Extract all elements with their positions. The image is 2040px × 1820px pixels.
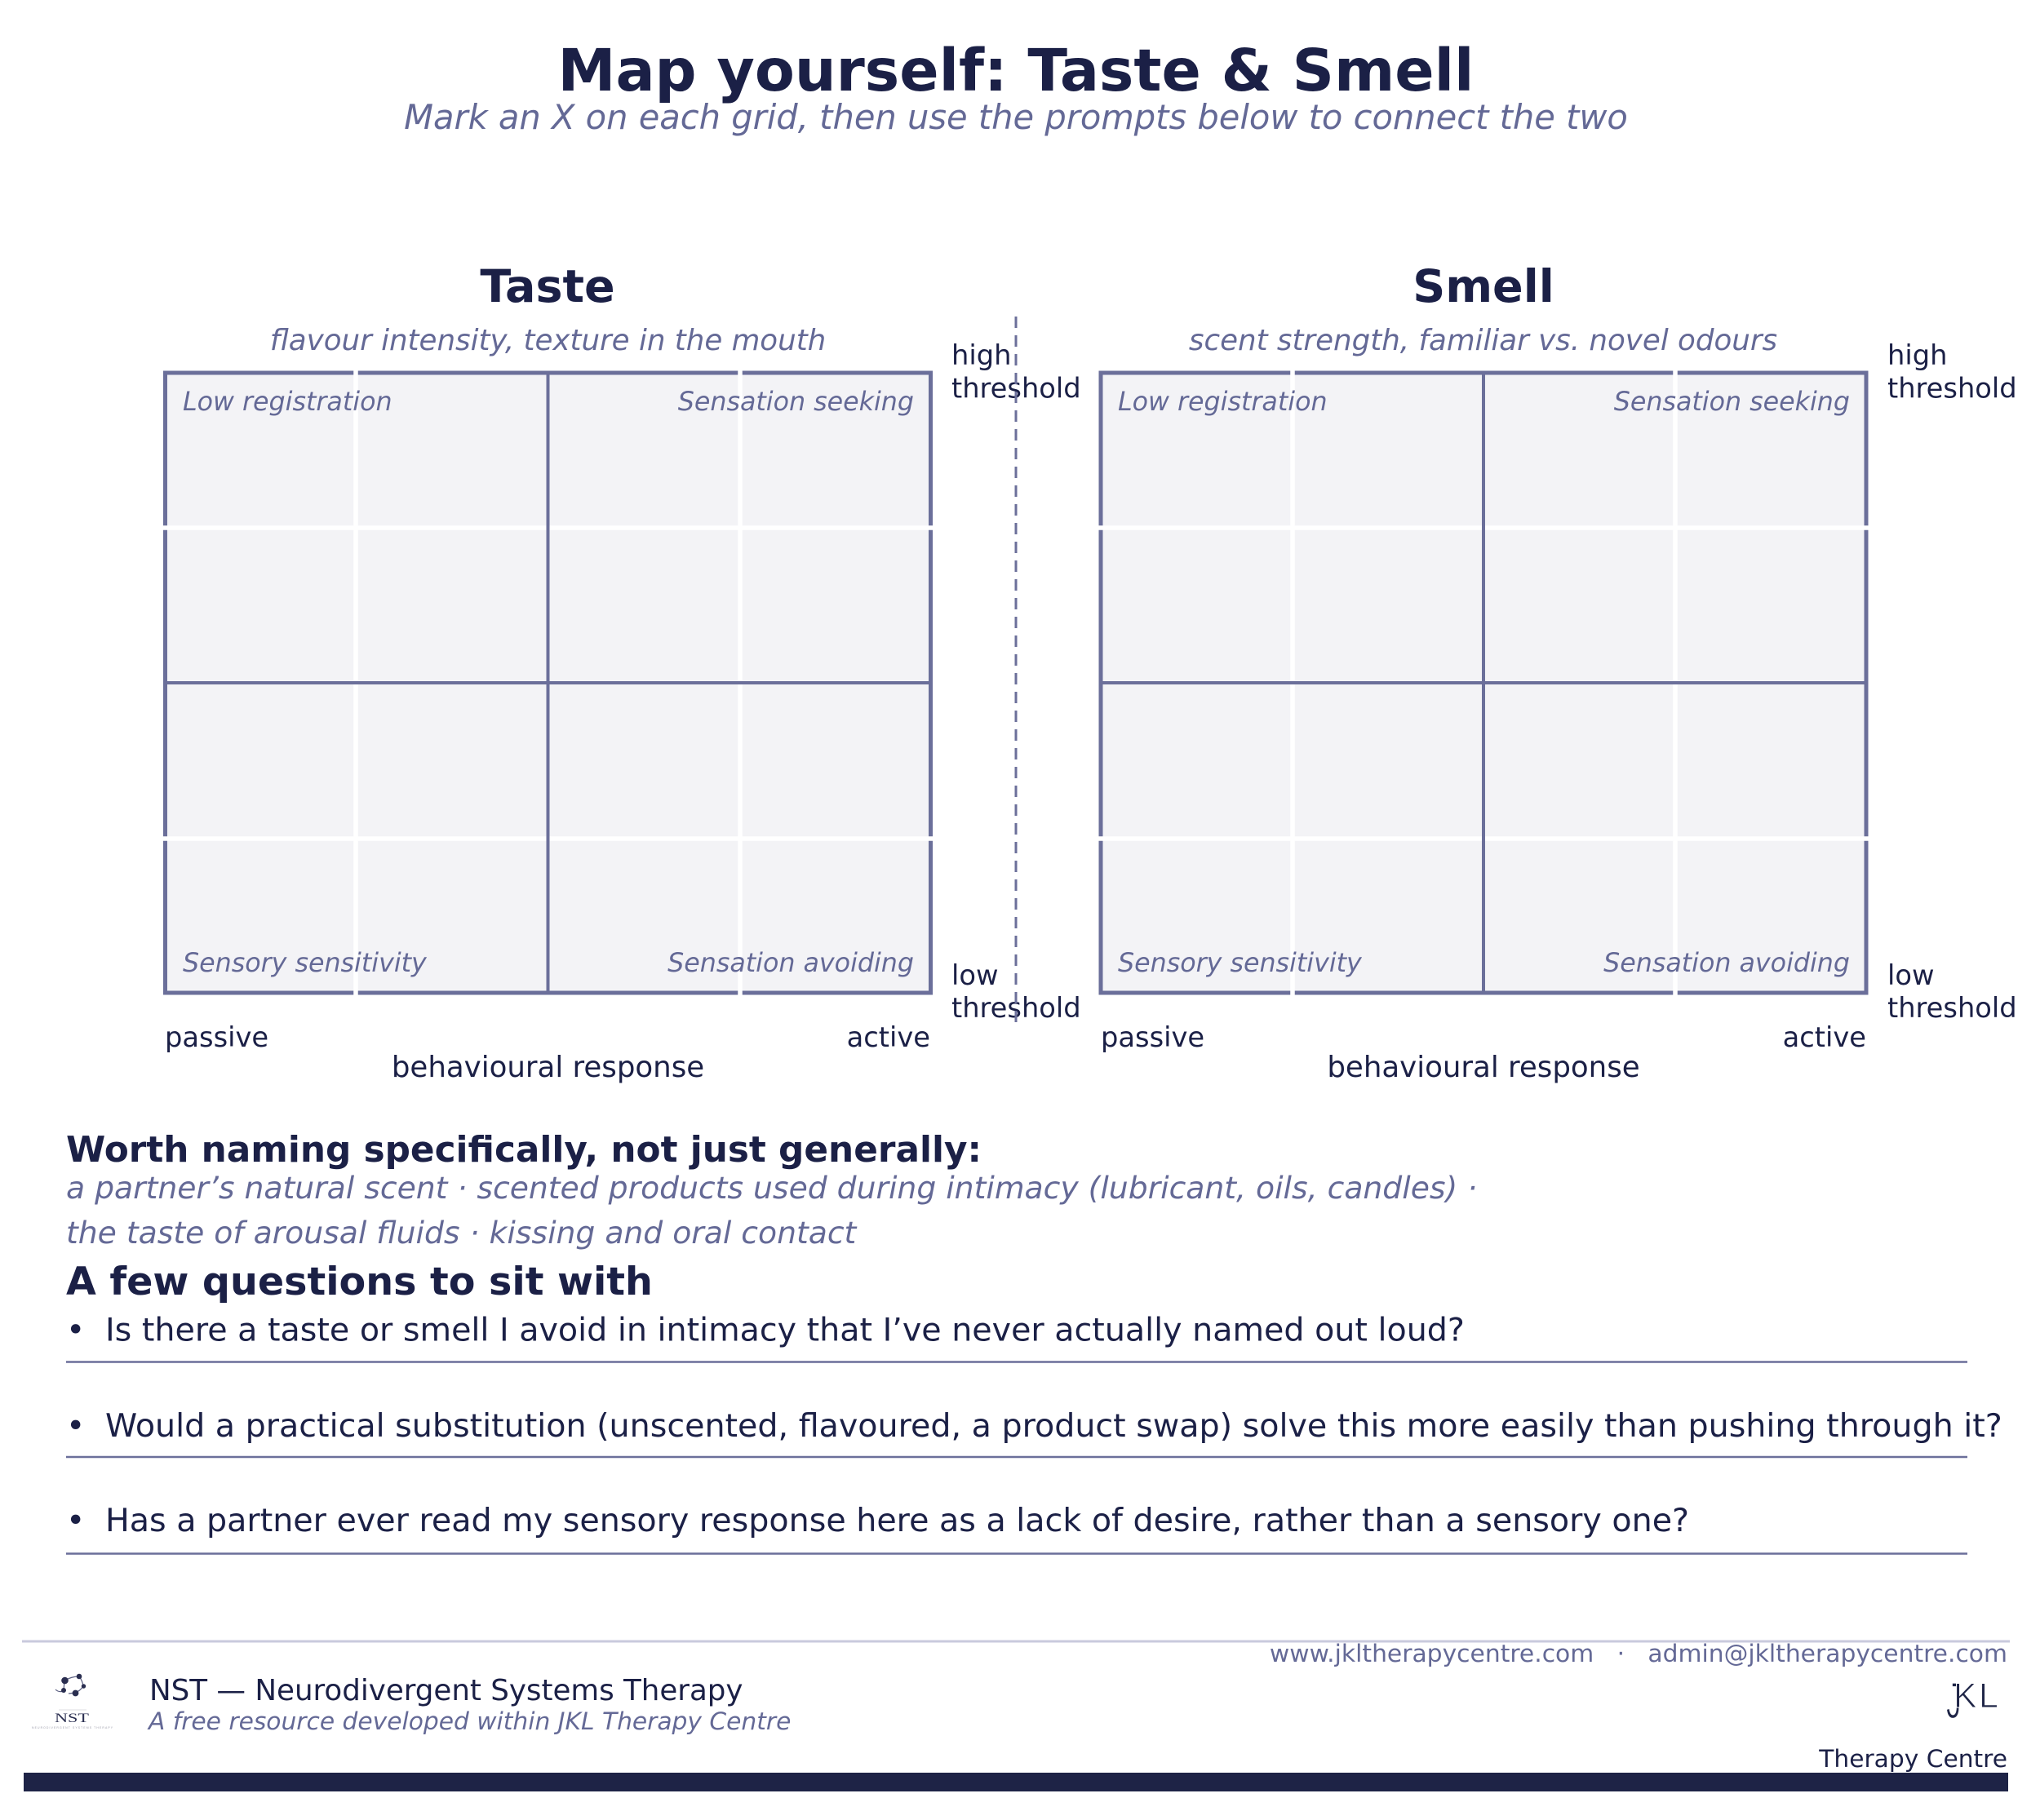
quadrant label: sensory sensitivity: Sensory sensitivity [183, 949, 428, 978]
smell quadrant grid [1097, 370, 1870, 996]
icon: JKL logo: KL [1954, 1676, 1998, 1716]
footer contact: www.jkltherapycentre.com · admin@jkltherapycentre.com [1270, 1640, 2007, 1668]
x axis title: behavioural response [1327, 1051, 1640, 1084]
x axis label: passive: passive [1101, 1021, 1204, 1053]
footer [22, 1640, 2010, 1791]
footer rule [22, 1640, 2010, 1643]
section: questions [66, 1260, 2002, 1553]
section: worth naming [66, 1129, 1477, 1251]
x axis label: active: active [847, 1021, 930, 1053]
y axis label: low threshold: threshold [1887, 992, 2017, 1024]
question 3 [66, 1502, 1967, 1553]
footer bar [24, 1773, 2008, 1791]
question 3: Has a partner ever read my sensory response here as a lack of desire, rather than a sensory one? [105, 1502, 1689, 1539]
questions heading: A few questions to sit with [66, 1260, 653, 1304]
taste subtitle: flavour intensity, texture in the mouth [270, 324, 826, 357]
y axis label: high threshold: high [951, 339, 1011, 371]
icon: NST logo: NST [55, 1712, 90, 1725]
footer organisation name: NST — Neurodivergent Systems Therapy [149, 1674, 743, 1707]
quadrant label: sensation avoiding: Sensation avoiding [1603, 949, 1850, 978]
quadrant label: sensory sensitivity: Sensory sensitivity [1118, 949, 1363, 978]
worth naming heading: Worth naming specifically, not just generally: [66, 1129, 982, 1171]
dashed divider [1015, 317, 1017, 1029]
quadrant label: sensation seeking: Sensation seeking [1614, 387, 1850, 417]
icon: JKL logo: J [1946, 1672, 1962, 1729]
question 2: • [66, 1407, 85, 1445]
footer therapy centre label: Therapy Centre [1818, 1745, 2007, 1774]
question 2: Would a practical substitution (unscented, flavoured, a product swap) solve this more easily than pushing through it? [105, 1407, 2002, 1445]
x axis label: passive: passive [165, 1021, 268, 1053]
icon: NST logo: NEURODIVERGENT SYSTEMS THERAPY [32, 1726, 113, 1729]
footer tagline: A free resource developed within JKL Therapy Centre [147, 1707, 791, 1736]
y axis label: low threshold: low [1887, 959, 1935, 991]
quadrant label: sensation seeking: Sensation seeking [678, 387, 914, 417]
question 3: • [66, 1502, 85, 1539]
smell subtitle: scent strength, familiar vs. novel odours [1189, 324, 1777, 357]
y axis label: low threshold: threshold [951, 992, 1081, 1024]
x axis title: behavioural response [392, 1051, 704, 1084]
panel: smell [1097, 260, 2017, 1084]
x axis label: active: active [1783, 1021, 1866, 1053]
worth naming list: a partner’s natural scent · scented products used during intimacy (lubricant, oils, candles) · [66, 1170, 1477, 1206]
worth naming list: the taste of arousal fluids · kissing and oral contact [66, 1215, 858, 1251]
subtitle: Mark an X on each grid, then use the prompts below to connect the two [404, 97, 1628, 137]
y axis label: high threshold: high [1887, 339, 1947, 371]
quadrant label: low registration: Low registration [183, 387, 392, 417]
y axis label: high threshold: threshold [1887, 372, 2017, 405]
question 1: Is there a taste or smell I avoid in intimacy that I’ve never actually named out loud? [105, 1312, 1465, 1349]
panel: taste [162, 260, 1081, 1084]
taste heading: Taste [480, 260, 615, 313]
taste quadrant grid [162, 370, 934, 996]
icon: NST logo [32, 1674, 113, 1729]
quadrant label: sensation avoiding: Sensation avoiding [667, 949, 914, 978]
question 1 [66, 1312, 1967, 1362]
quadrant label: low registration: Low registration [1118, 387, 1328, 417]
question 1: • [66, 1312, 85, 1349]
icon: JKL logo [1946, 1672, 1998, 1729]
title: Map yourself: Taste & Smell [558, 37, 1474, 104]
smell heading: Smell [1412, 260, 1554, 313]
y axis label: low threshold: low [951, 959, 999, 991]
y axis label: high threshold: threshold [951, 372, 1081, 405]
